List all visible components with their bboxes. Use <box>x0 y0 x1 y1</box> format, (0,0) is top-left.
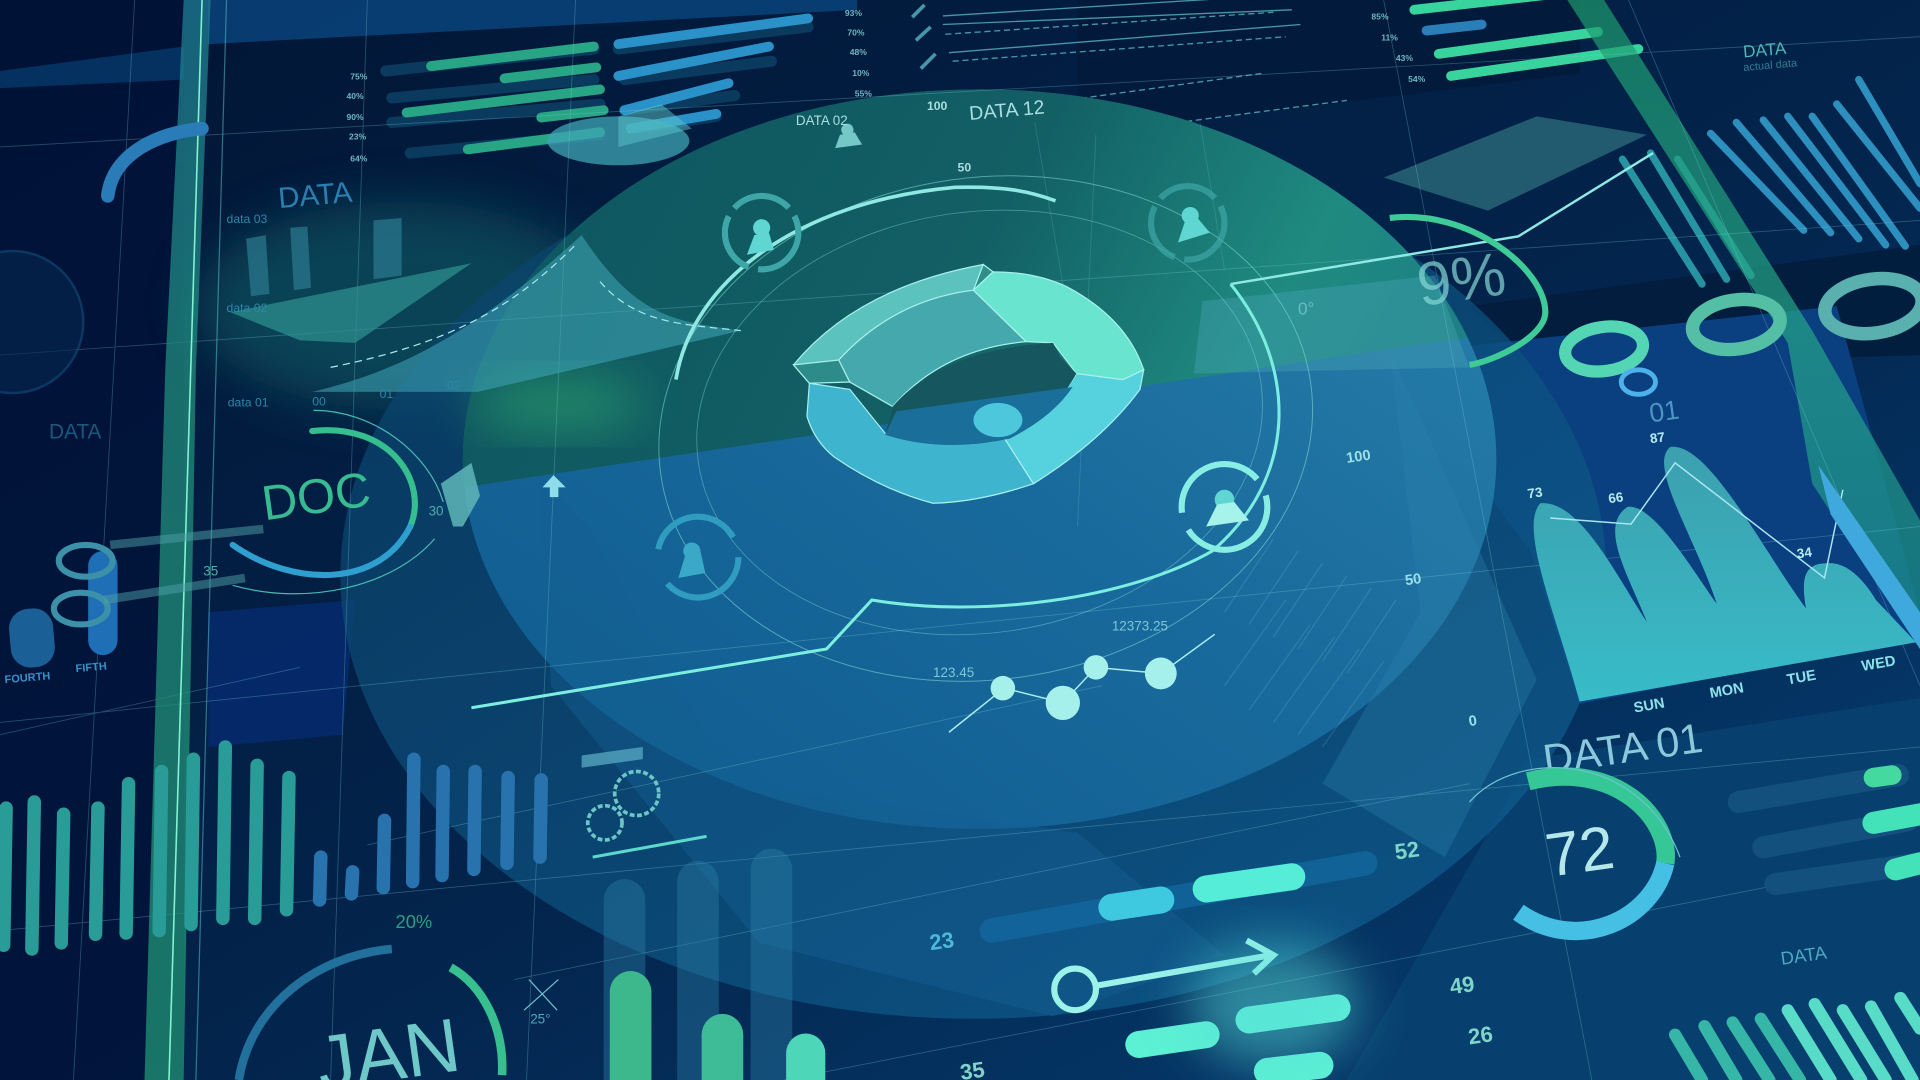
DATA heading left: DATA <box>277 176 354 215</box>
bottom numbers: DATA <box>1779 942 1829 969</box>
top horizontal bars <box>386 18 808 153</box>
line chart points <box>933 619 1215 732</box>
top centre labels: actual data <box>1743 57 1798 74</box>
bottom numbers: 52 <box>1393 836 1421 865</box>
mountain chart: MON <box>1709 680 1745 702</box>
orbit rings <box>471 134 1653 857</box>
axis numbers: 100 <box>1345 448 1372 467</box>
percentage labels: 11% <box>1381 32 1398 42</box>
percentage labels: 93% <box>845 8 862 18</box>
bottom numbers: 49 <box>1448 971 1476 999</box>
small left capsules <box>4 529 263 686</box>
bottom numbers: 23 <box>928 927 956 955</box>
area chart left <box>312 235 741 392</box>
percentage labels: 54% <box>1408 74 1426 84</box>
bottom numbers: 26 <box>1467 1021 1494 1049</box>
panel behind gauge <box>1194 276 1469 373</box>
mountain chart: 73 <box>1526 484 1543 501</box>
bottom centre bars <box>624 869 806 1080</box>
top centre labels: DATA 12 <box>968 96 1045 125</box>
left chart block <box>230 218 471 343</box>
mountain chart: SUN <box>1633 695 1666 717</box>
line chart points: 12373.25 <box>1112 619 1168 634</box>
JAN gauge: 25° <box>530 1012 551 1027</box>
percentage labels: 90% <box>347 112 364 122</box>
hatch lines <box>1224 539 1396 747</box>
line chart points: 123.45 <box>933 665 974 680</box>
bottom soft blue panel <box>539 475 1224 1016</box>
green glow <box>471 377 643 431</box>
percentage labels: 55% <box>855 89 872 99</box>
small left capsules: FIFTH <box>75 661 107 675</box>
JAN gauge: 20% <box>396 911 432 932</box>
top centre labels: DATA <box>1742 38 1788 62</box>
up arrow <box>542 475 566 497</box>
small text labels left: data 02 <box>227 301 268 315</box>
top centre labels <box>796 38 1798 174</box>
9 percent gauge: 9% <box>1413 239 1510 319</box>
mountain chart: 34 <box>1796 544 1813 561</box>
grey 3D shape right <box>1384 116 1647 211</box>
top-left gauge <box>108 129 202 196</box>
percentage labels: 10% <box>852 68 870 78</box>
teal upper disc <box>463 89 1468 486</box>
small text labels left <box>49 212 461 443</box>
bright glow bottom <box>1188 943 1359 1065</box>
9 percent gauge: 0° <box>1298 299 1314 319</box>
user icon nodes <box>658 124 1267 598</box>
mountain chart <box>1526 395 1920 717</box>
small 3D rings <box>1562 273 1920 394</box>
percentage labels: 64% <box>350 154 368 164</box>
small text labels left: 00 <box>312 394 326 408</box>
small text labels left: 02 <box>447 378 461 392</box>
DOC gauge <box>203 410 444 594</box>
axis numbers <box>1345 448 1478 730</box>
bottom pills <box>992 775 1920 1071</box>
bottom numbers <box>928 836 1829 1080</box>
small text labels left: 01 <box>380 387 393 401</box>
top right green bars <box>1414 0 1638 76</box>
small label bar <box>582 747 643 768</box>
mountain chart: 66 <box>1607 489 1624 506</box>
percentage labels: 43% <box>1396 53 1413 63</box>
soft teal block behind left charts <box>196 202 612 410</box>
right blue panel <box>1322 349 1537 857</box>
axis numbers: 0 <box>1468 713 1478 730</box>
bottom left vertical bars chart <box>4 747 541 949</box>
axis numbers: 50 <box>1404 571 1422 589</box>
small gear icons <box>588 771 659 840</box>
DOC gauge: DOC <box>259 463 374 531</box>
small text labels left: data 01 <box>228 396 269 410</box>
right bars <box>1622 80 1920 284</box>
percentage labels <box>347 8 1426 164</box>
percentage labels: 70% <box>847 28 865 38</box>
arrow <box>1054 940 1273 1010</box>
center 3D donut chart <box>793 264 1144 503</box>
left faint circle <box>0 251 83 393</box>
top right green band <box>1567 0 1920 649</box>
small text labels left: DATA <box>49 420 101 443</box>
mountain chart: TUE <box>1786 668 1818 688</box>
JAN gauge <box>239 911 558 1080</box>
small text labels left: data 03 <box>227 212 268 226</box>
9 percent gauge <box>1298 217 1545 365</box>
percentage labels: 40% <box>347 91 364 101</box>
percentage labels: 23% <box>349 132 367 142</box>
percentage labels: 75% <box>350 72 368 82</box>
DOC gauge: 35 <box>203 564 218 579</box>
top dashed data lines <box>906 0 1347 147</box>
top centre labels: DATA 02 <box>796 113 848 128</box>
blue inner disc <box>463 89 1496 829</box>
large outer disc <box>340 132 1607 1019</box>
top centre labels: 50 <box>958 160 971 174</box>
mountain chart: WED <box>1860 653 1897 675</box>
top centre labels: 100 <box>927 99 948 113</box>
pie chart top <box>547 104 692 165</box>
left vertical green band <box>144 0 227 1080</box>
DATA 01 donut: DATA 01 <box>1540 714 1705 783</box>
percentage labels: 85% <box>1371 12 1389 22</box>
DATA 01 donut <box>1469 714 1705 931</box>
mountain chart: 87 <box>1649 429 1666 446</box>
small left capsules: FOURTH <box>4 670 51 686</box>
percentage labels: 48% <box>850 47 867 57</box>
DATA 01 donut: 72 <box>1541 813 1618 890</box>
rocket icon <box>441 463 480 527</box>
bottom right bars chart <box>1675 998 1920 1080</box>
DOC gauge: 30 <box>429 504 444 519</box>
mountain chart: 01 <box>1647 395 1681 428</box>
